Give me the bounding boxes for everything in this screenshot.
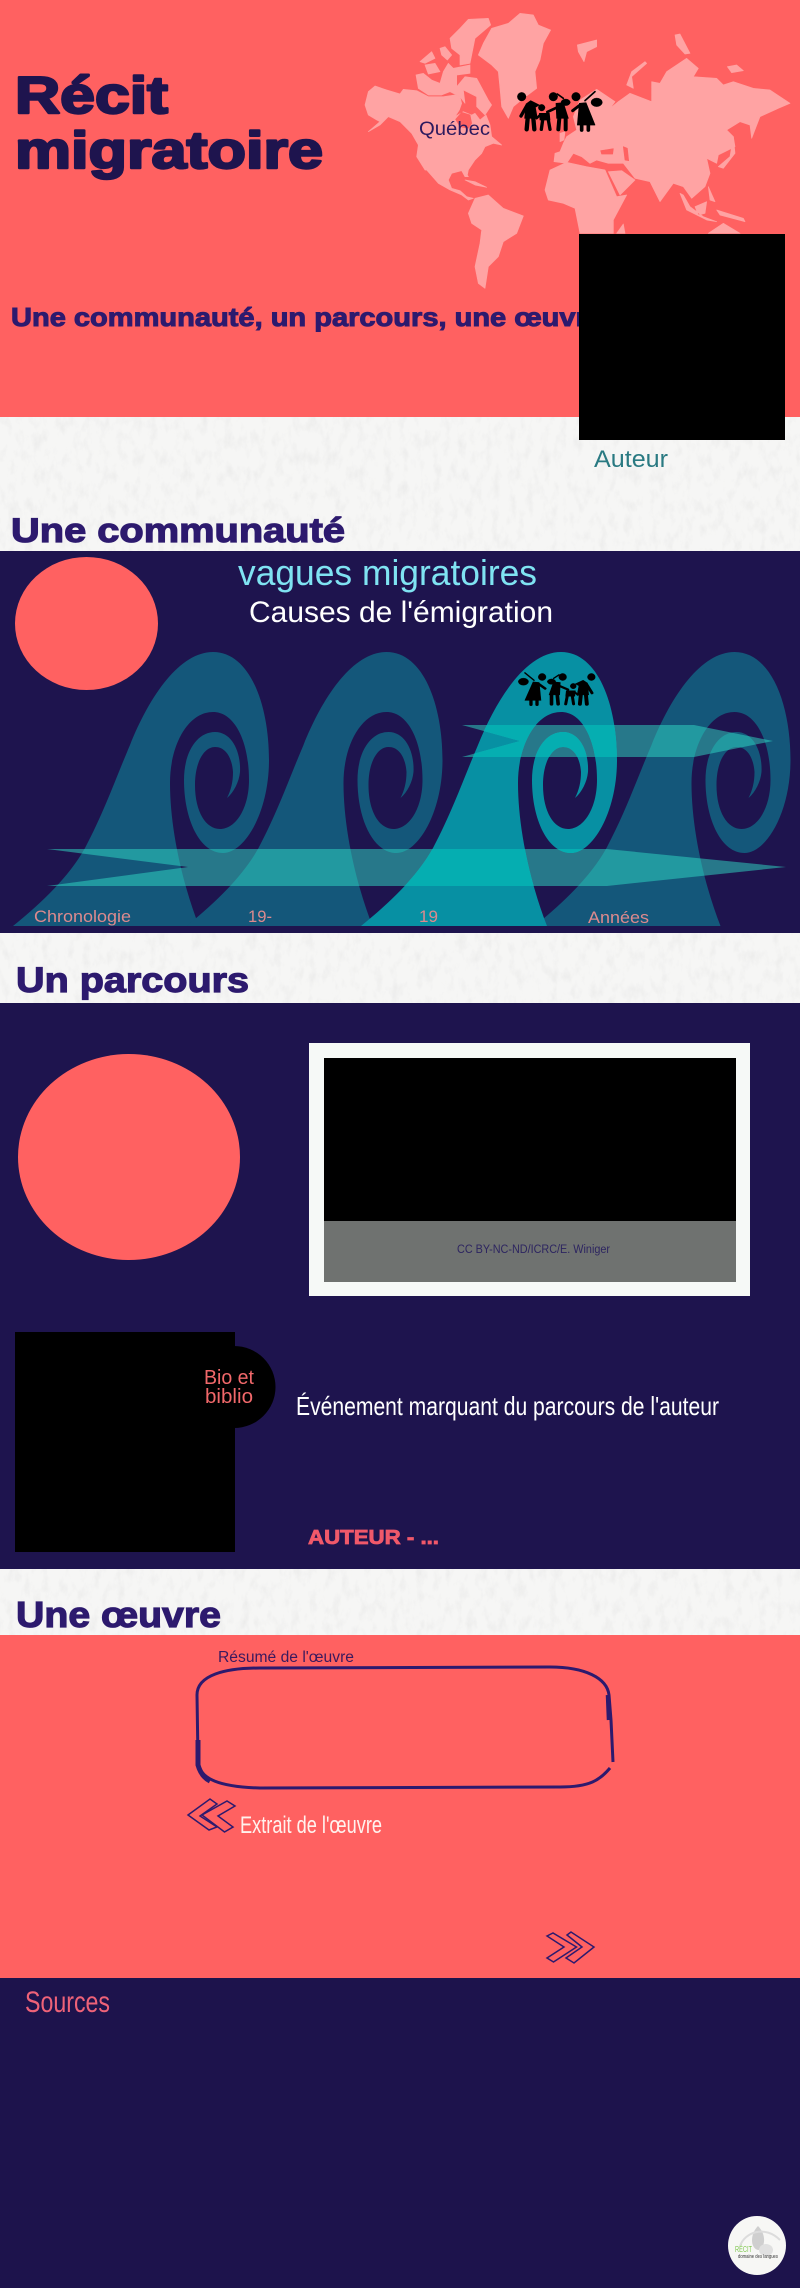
coral circle [18,1054,240,1260]
logo: RÉCIT: domaine des langues [738,2254,778,2260]
text: extrait: Extrait de l'œuvre [240,1812,382,1839]
logo: RÉCIT: RÉCIT [735,2245,752,2254]
icon: migrant family [517,92,602,130]
timeline labels: Années [588,908,649,927]
label: auteur: AUTEUR - ... [308,1527,439,1549]
subtitle: Une communauté, un parcours, une œuvre [11,302,603,332]
photo credit: CC BY-NC-ND/ICRC/E. Winiger [457,1244,610,1256]
label: Bio et biblio [204,1367,254,1408]
photo placeholder: author [579,234,785,440]
heading: Une communauté: Une communauté [11,512,345,550]
title: migratoire [15,122,323,180]
heading: Un parcours: Un parcours [16,961,249,1000]
timeline labels: Chronologie [34,907,131,926]
icon: left chevrons [188,1799,235,1832]
panel: sources [0,1978,800,2288]
paper background bands [0,417,800,1635]
title [15,67,323,180]
photo placeholder: bio [15,1332,235,1552]
illustration: waves [13,652,790,926]
coral sun [15,557,158,690]
heading: vagues migratoires: vagues migratoires [238,552,537,593]
icon: migrant family [518,673,595,704]
arrow band: upper timeline [462,725,773,757]
icon: right chevrons [547,1932,594,1963]
arrow band: lower timeline [47,849,786,886]
band overlap on central wave [404,725,617,886]
photo frame with caption [309,1043,750,1296]
text: causes: Causes de l'émigration [249,596,553,629]
label: Bio et biblio: Bio et [204,1367,254,1389]
panel: vagues migratoires [0,551,800,933]
logo: RÉCIT [728,2216,786,2275]
panel: parcours [0,1003,800,1569]
timeline labels: 19 [419,907,438,926]
bio badge circle [192,1346,276,1428]
panel: hero header [0,0,800,417]
world map [365,13,790,288]
panel: œuvre [0,1635,800,1978]
label: Québec: Québec [419,119,490,140]
hand-drawn summary box [197,1667,613,1788]
label: Bio et biblio: biblio [205,1386,253,1408]
title: Récit [15,67,168,125]
label: Auteur: Auteur [594,446,668,473]
heading: Une œuvre: Une œuvre [16,1594,221,1635]
label: résumé: Résumé de l'œuvre [218,1649,354,1666]
heading: Sources: Sources [25,1986,110,2019]
timeline labels [34,907,649,927]
timeline labels: 19- [248,907,272,926]
